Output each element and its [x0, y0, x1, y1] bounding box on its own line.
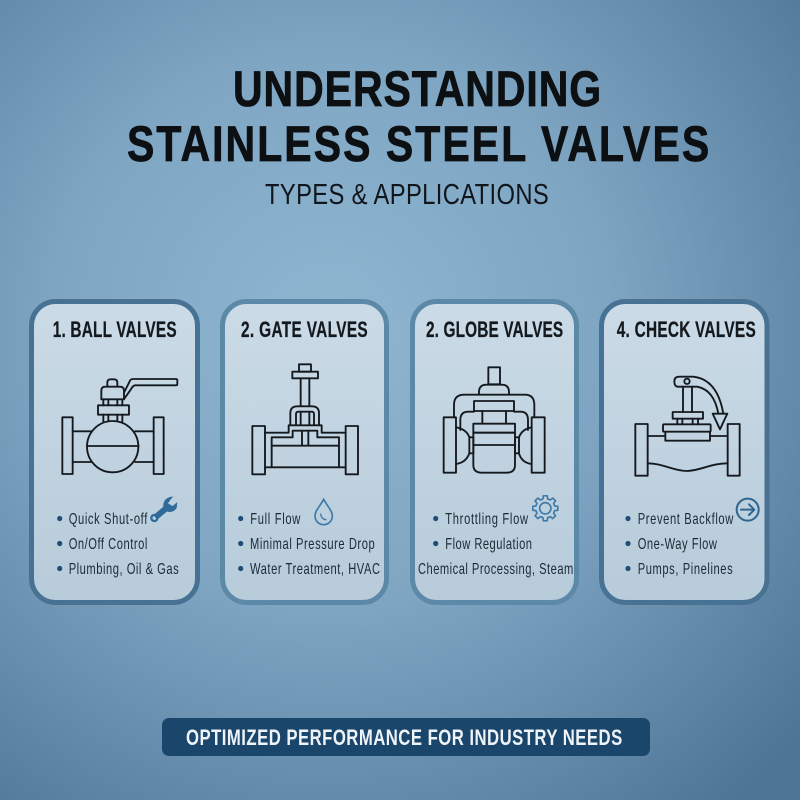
bullet list: check valves: [625, 510, 734, 577]
icon: globe valve: [444, 367, 545, 473]
bullet list: check valves: Prevent Backflow: [638, 510, 734, 527]
icon: check valve: [635, 377, 740, 476]
icon: wrench: [151, 497, 177, 521]
panel: check valves: [602, 302, 767, 602]
heading: globe valves: 2. GLOBE VALVES: [426, 318, 563, 343]
banner: OPTIMIZED PERFORMANCE FOR INDUSTRY NEEDS: [186, 726, 622, 751]
bullet list: ball valves: Plumbing, Oil & Gas: [69, 560, 179, 577]
heading: check valves: 4. CHECK VALVES: [617, 318, 756, 343]
bullet list: globe valves: Flow Regulation: [445, 535, 532, 552]
bullet list: gate valves: Minimal Pressure Drop: [250, 535, 375, 552]
icon: gate valve: [252, 364, 358, 474]
bullet list: gate valves: Water Treatment, HVAC: [250, 560, 380, 577]
icon: water drop: [315, 499, 332, 525]
bullet list: gate valves: Full Flow: [250, 510, 300, 527]
icon: arrow in circle: [737, 499, 759, 521]
bullet list: ball valves: [57, 510, 179, 577]
title: [127, 61, 709, 172]
title: UNDERSTANDING: [233, 61, 601, 117]
heading: gate valves: 2. GATE VALVES: [241, 318, 368, 343]
icon: ball valve: [62, 379, 177, 474]
panel: ball valves: [32, 302, 198, 602]
bullet list: globe valves: [418, 510, 573, 577]
title: STAINLESS STEEL VALVES: [127, 116, 709, 172]
bullet list: gate valves: [238, 510, 380, 577]
banner: [162, 718, 650, 756]
panel: gate valves: [222, 302, 386, 602]
bullet list: ball valves: On/Off Control: [69, 535, 147, 552]
bullet list: ball valves: Quick Shut-off: [69, 510, 148, 527]
heading: ball valves: 1. BALL VALVES: [53, 318, 177, 343]
bullet list: globe valves: Chemical Processing, Steam: [418, 560, 573, 577]
bullet list: check valves: One-Way Flow: [638, 535, 717, 552]
bullet list: check valves: Pumps, Pinelines: [638, 560, 733, 577]
subtitle: TYPES & APPLICATIONS: [265, 178, 549, 211]
icon: gear: [533, 496, 558, 521]
bullet list: globe valves: Throttling Flow: [445, 510, 528, 527]
panel: globe valves: [412, 302, 576, 602]
